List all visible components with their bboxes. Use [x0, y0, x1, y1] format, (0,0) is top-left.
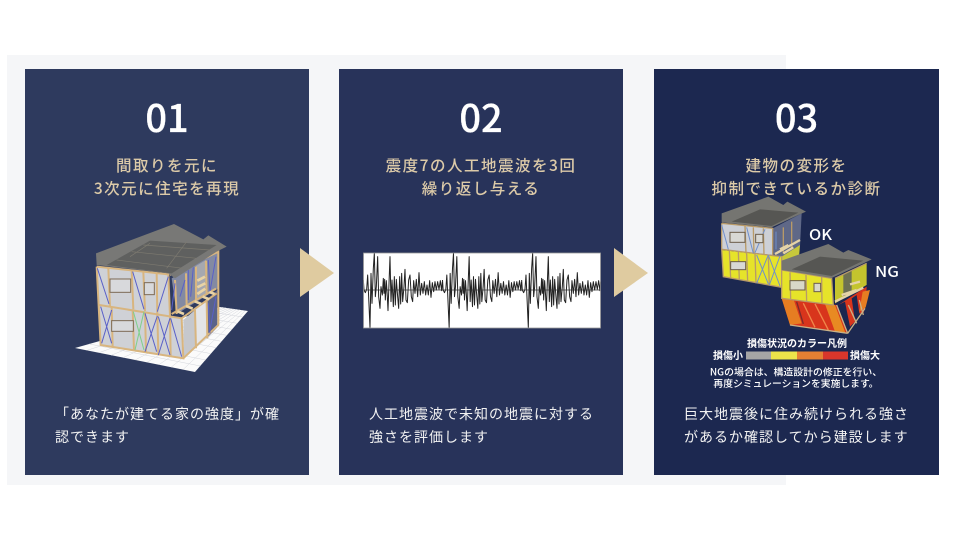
chart: seismic waveform	[363, 253, 601, 328]
legend: damage color scale	[710, 335, 882, 390]
text: step 01 description: 認できます	[55, 427, 130, 447]
text: step 02 description: 強さを評価します	[369, 427, 489, 447]
text: step 03 description: があるか確認してから建設します	[684, 427, 909, 447]
side lower floor	[183, 310, 195, 358]
heading: step 02	[386, 154, 576, 198]
heading: step 03	[711, 154, 882, 198]
arrow: step 2 to 3	[614, 248, 648, 297]
windows	[110, 279, 154, 331]
text: step 02 description	[369, 404, 594, 447]
number 02: 02	[459, 88, 503, 143]
note: re-simulation: 再度シミュレーションを実施します。	[713, 376, 879, 390]
OK house	[722, 197, 806, 287]
NG house	[782, 244, 872, 333]
NG lower front	[782, 298, 848, 333]
heading: step 01	[94, 154, 240, 198]
legend title: 損傷状況のカラー凡例	[747, 335, 847, 350]
arrow: step 1 to 2	[300, 248, 334, 297]
label: NG: NG	[875, 261, 899, 282]
number 03: 03	[775, 88, 818, 143]
panel: step 03	[654, 69, 939, 475]
side upper floor	[172, 252, 218, 314]
heading: step 02: 震度7の人工地震波を3回	[386, 154, 576, 176]
front walls	[97, 267, 183, 358]
text: step 01 description	[55, 404, 280, 447]
legend color bar	[746, 352, 848, 360]
heading: step 01: 間取りを元に	[116, 154, 218, 176]
number 01: 01	[145, 88, 189, 143]
text: step 03 description: 巨大地震後に住み続けられる強さ	[684, 404, 909, 424]
heading: step 03: 抑制できているか診断	[711, 176, 882, 198]
roof	[96, 224, 227, 278]
heading: step 02: 繰り返し与える	[422, 176, 540, 198]
heading: step 01: 3次元に住宅を再現	[94, 176, 240, 198]
text: step 02 description: 人工地震波で未知の地震に対する	[369, 404, 594, 424]
label: OK: OK	[809, 224, 832, 245]
icon: 3D house model	[75, 224, 248, 372]
NG lower side	[837, 285, 870, 333]
heading: step 03: 建物の変形を	[745, 154, 848, 176]
text: step 01 description: 「あなたが建てる家の強度」が確	[55, 404, 280, 424]
text: step 03 description	[684, 404, 909, 447]
legend high label: 損傷大	[850, 347, 880, 362]
background band	[7, 55, 786, 485]
ground grid	[75, 307, 248, 372]
panel: step 02	[339, 69, 623, 475]
note: NG handling: NGの場合は、構造設計の修正を行い、	[710, 364, 882, 378]
balcony steps	[177, 277, 215, 314]
icon: OK and NG houses	[722, 197, 872, 333]
legend low label: 損傷小	[713, 347, 743, 362]
panel: step 01	[25, 69, 309, 475]
